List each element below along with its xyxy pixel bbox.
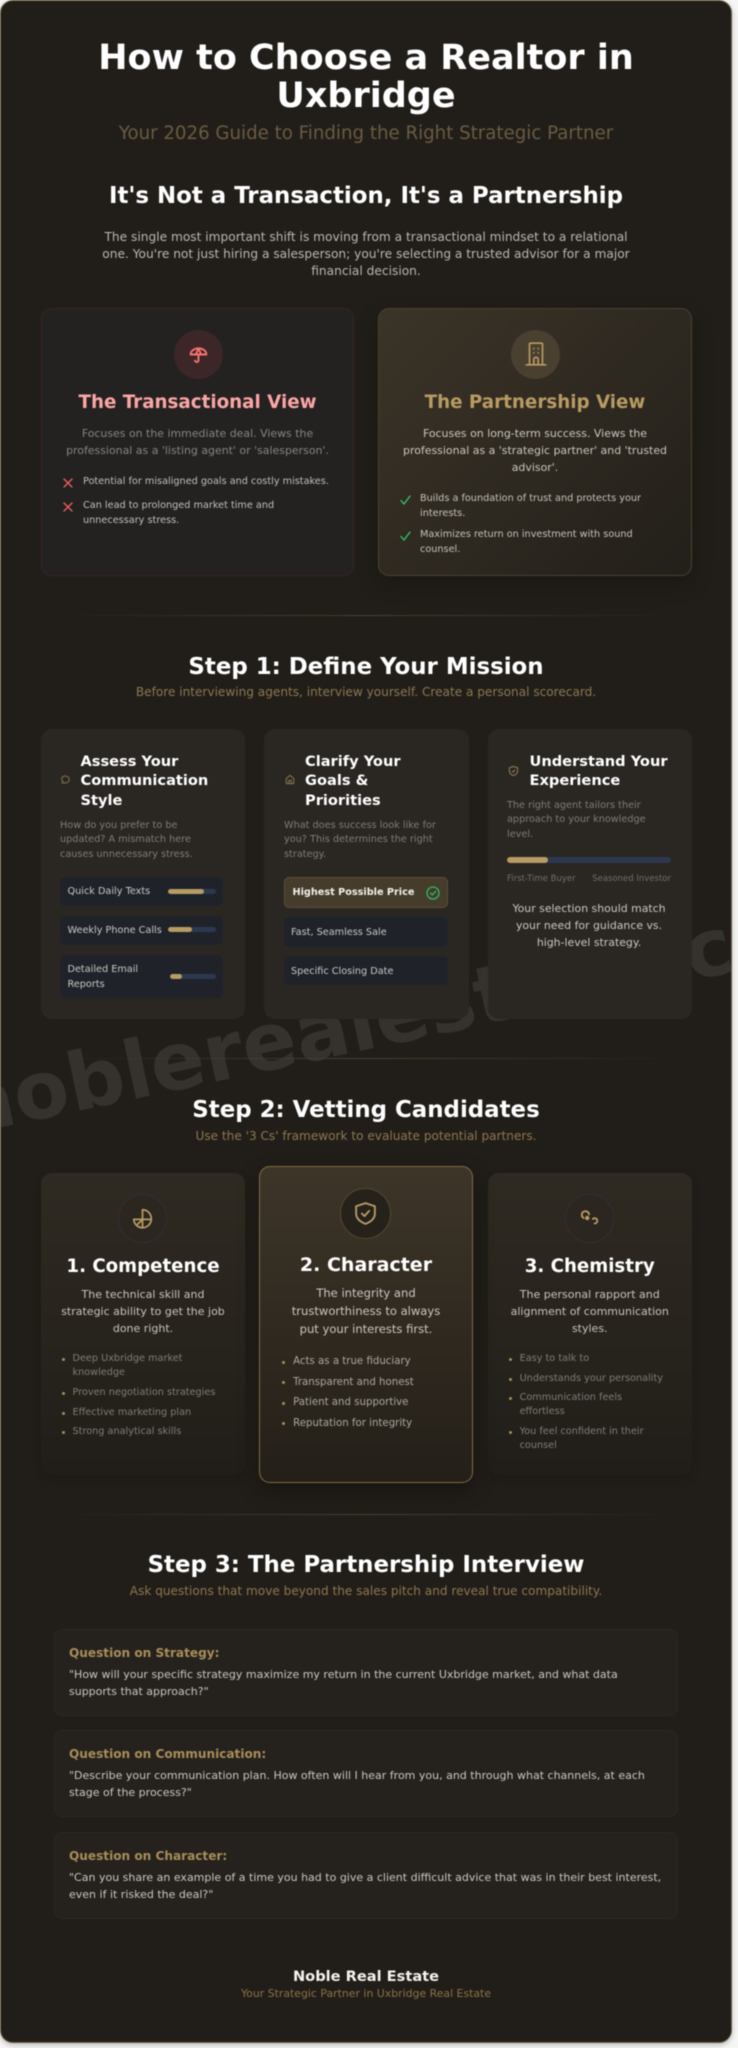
description	[60, 820, 193, 860]
description: professional as a 'strategic partner' and 'trusted	[403, 444, 667, 456]
option: detailed email reports: Reports	[68, 978, 105, 990]
list	[508, 1353, 663, 1451]
list item: return on investment	[400, 528, 633, 554]
description	[284, 820, 436, 860]
description: professional as a 'listing agent' or 'salesperson'.	[66, 444, 329, 456]
heading: step 1: Step 1: Define Your Mission	[188, 654, 544, 680]
bullet: market knowledge	[61, 1353, 182, 1378]
description: The right agent tailors their	[507, 800, 641, 811]
note: high-level strategy.	[537, 936, 641, 948]
bar 75%	[168, 888, 216, 894]
bullet: negotiation: Proven negotiation strategies	[72, 1387, 215, 1398]
list item: trust: Builds a foundation of trust and protects your	[420, 492, 641, 504]
subtitle: Your 2026 Guide to Finding the Right Strategic Partner	[119, 123, 613, 144]
list item: prolonged market time: Can lead to prolonged market time and	[83, 500, 274, 510]
bullet: confidence: You feel confident in their	[520, 1426, 644, 1437]
note	[512, 902, 666, 949]
footer brand: Noble Real Estate	[293, 1968, 439, 1985]
bullet: market knowledge: Deep Uxbridge market	[72, 1353, 182, 1364]
description: put your interests first.	[300, 1322, 432, 1336]
description	[292, 1286, 440, 1336]
description: How do you prefer to be	[60, 820, 177, 831]
option: specific closing date	[284, 956, 448, 985]
step 3 subtitle: Ask questions that move beyond the sales pitch and reveal true compatibility.	[130, 1584, 602, 1598]
bullet: fiduciary: Acts as a true fiduciary	[293, 1356, 411, 1367]
list item: misaligned goals: Potential for misaligned goals and costly mistakes.	[83, 476, 329, 486]
intro text	[102, 230, 630, 278]
title: Uxbridge	[276, 76, 456, 116]
icon: pie chart	[118, 1194, 166, 1242]
bar 25%	[170, 974, 216, 979]
icon: umbrella	[174, 330, 222, 378]
list item: prolonged market time: unnecessary stress.	[83, 514, 179, 526]
question card: strategy	[54, 1629, 678, 1716]
description: done right.	[113, 1322, 173, 1334]
question card: communication	[54, 1730, 678, 1817]
list item: trust	[400, 492, 642, 518]
option: detailed email reports: Detailed Email	[68, 964, 138, 974]
icon: message	[60, 775, 70, 784]
panel: goals and priorities	[264, 729, 469, 1019]
bullet: communication	[508, 1392, 622, 1417]
description: level.	[507, 829, 533, 840]
bullet: confidence: counsel	[520, 1440, 557, 1451]
panel: understand your experience	[488, 729, 692, 1019]
list	[61, 1353, 216, 1437]
panel: the transactional view	[41, 308, 354, 576]
bullet: transparent: Transparent and honest	[293, 1377, 414, 1388]
option: detailed email reports	[60, 955, 223, 998]
heading: partnership: It's Not a Transaction, It's a Partnership	[109, 183, 623, 209]
description: you? This determines the right	[284, 834, 433, 845]
description: What does success look like for	[284, 820, 436, 831]
option: highest possible price (selected): Highest Possible Price	[292, 886, 414, 898]
option: fast seamless sale: Fast, Seamless Sale	[291, 926, 387, 938]
list item: trust: interests.	[420, 508, 465, 518]
heading: step 2: Step 2: Vetting Candidates	[192, 1097, 540, 1123]
note: Your selection should match	[512, 902, 666, 914]
list item: return on investment: Maximizes return on investment with sound	[420, 528, 633, 540]
intro text: one. You're not just hiring a salesperson; you're selecting a trusted advisor for a major	[102, 246, 630, 260]
icon: shield check	[340, 1188, 391, 1238]
intro text: financial decision.	[311, 264, 421, 278]
option: quick daily texts: Quick Daily Texts	[68, 886, 150, 897]
intro text: The single most important shift is moving from a transactional mindset to a relational	[104, 230, 628, 244]
question: "How will your specific strategy maximize my return in the current Uxbridge market, and what data	[69, 1668, 618, 1681]
heading: step 3: Step 3: The Partnership Interview	[148, 1552, 584, 1578]
heading: Style	[80, 792, 122, 808]
heading: 2. Character	[300, 1254, 432, 1276]
heading: Assess Your	[80, 752, 178, 770]
experience slider	[507, 857, 671, 863]
icon: green check	[426, 886, 440, 900]
panel: chemistry	[488, 1173, 692, 1475]
footer tagline: Your Strategic Partner in Uxbridge Real Estate	[241, 1987, 491, 2000]
description: styles.	[572, 1322, 608, 1334]
heading	[80, 752, 208, 809]
question: "Describe your communication plan. How often will I hear from you, and through what channels, at each	[69, 1769, 645, 1782]
description: strategy.	[284, 849, 326, 860]
icon: shield	[508, 765, 519, 777]
description: Focuses on long-term success. Views the	[423, 426, 647, 440]
heading: 3. Chemistry	[525, 1256, 655, 1277]
option: highest possible price (selected)	[284, 877, 448, 908]
heading: Experience	[530, 772, 620, 789]
description: Focuses on the immediate deal. Views the	[82, 426, 313, 440]
option: quick daily texts	[60, 877, 223, 906]
description: advisor'.	[512, 460, 558, 474]
heading: Communication	[80, 772, 208, 789]
option: weekly phone calls	[60, 916, 223, 945]
panel: communication style	[41, 729, 245, 1019]
panel: character (highlighted)	[259, 1166, 473, 1483]
description: causes unnecessary stress.	[60, 849, 193, 860]
question: "Can you share an example of a time you had to give a client difficult advice that was in their best interest,	[69, 1870, 661, 1884]
question: stage of the process?"	[69, 1786, 192, 1799]
description: trustworthiness to always	[292, 1304, 440, 1318]
question card: character	[54, 1832, 678, 1918]
label: Question on Communication:	[69, 1747, 266, 1761]
heading: The Transactional View	[78, 392, 317, 413]
bullet: easy to talk to: Easy to talk to	[520, 1353, 589, 1364]
slider labels	[507, 874, 672, 884]
icon: building	[511, 330, 560, 378]
title: How to Choose a Realtor in	[98, 38, 634, 78]
icon: home	[285, 774, 295, 785]
label: Question on Character:	[69, 1848, 227, 1862]
description	[510, 1288, 669, 1335]
panel: the partnership view	[378, 308, 692, 576]
list item: prolonged market time	[62, 500, 274, 526]
bullet: market knowledge: knowledge	[72, 1367, 125, 1378]
heading: 1. Competence	[66, 1256, 220, 1277]
note: your need for guidance vs.	[516, 918, 662, 932]
step 2 subtitle: Use the '3 Cs' framework to evaluate potential partners.	[196, 1129, 536, 1143]
panel: competence	[41, 1173, 245, 1475]
description: alignment of communication	[511, 1304, 669, 1318]
bullet: reputation: Reputation for integrity	[293, 1418, 412, 1429]
description: The technical skill and	[82, 1288, 204, 1300]
list	[281, 1355, 414, 1429]
heading	[304, 752, 402, 808]
description	[61, 1288, 225, 1335]
question: supports that approach?"	[69, 1685, 209, 1698]
slider labels: First-Time Buyer	[507, 874, 576, 884]
label: Question on Strategy:	[69, 1646, 219, 1660]
icon: handshake	[565, 1194, 614, 1242]
bullet: confidence	[508, 1426, 644, 1451]
heading: Understand Your	[530, 752, 668, 770]
bullet: analytics: Strong analytical skills	[72, 1426, 181, 1437]
description: updated? A mismatch here	[60, 834, 191, 845]
bullet: communication: effortless	[520, 1406, 565, 1417]
bullet: personality: Understands your personality	[520, 1373, 663, 1384]
description: strategic ability to get the job	[61, 1304, 225, 1318]
step 1 subtitle: Before interviewing agents, interview yourself. Create a personal scorecard.	[136, 685, 596, 699]
slider labels: Seasoned Investor	[592, 874, 671, 884]
option: weekly phone calls: Weekly Phone Calls	[68, 925, 162, 936]
bullet: marketing: Effective marketing plan	[72, 1407, 191, 1418]
question	[69, 1668, 618, 1698]
question	[69, 1769, 645, 1799]
heading: The Partnership View	[425, 392, 645, 413]
heading: Priorities	[305, 792, 381, 808]
description	[403, 426, 667, 474]
question	[69, 1868, 661, 1902]
description	[66, 426, 329, 456]
title	[98, 38, 634, 116]
bullet: communication: Communication feels	[520, 1392, 622, 1403]
description: The integrity and	[316, 1286, 416, 1300]
heading: Clarify Your	[305, 752, 401, 770]
option: fast seamless sale	[284, 917, 448, 947]
question: even if it risked the deal?"	[69, 1888, 213, 1900]
heading: Goals &	[305, 772, 368, 789]
heading	[530, 752, 668, 789]
list item: return on investment: counsel.	[420, 544, 460, 554]
description	[506, 800, 646, 840]
bullet: patient: Patient and supportive	[293, 1397, 408, 1408]
option: specific closing date: Specific Closing Date	[291, 966, 393, 976]
description: The personal rapport and	[520, 1288, 660, 1300]
description: approach to your knowledge	[507, 814, 646, 825]
bar 50%	[168, 926, 216, 932]
